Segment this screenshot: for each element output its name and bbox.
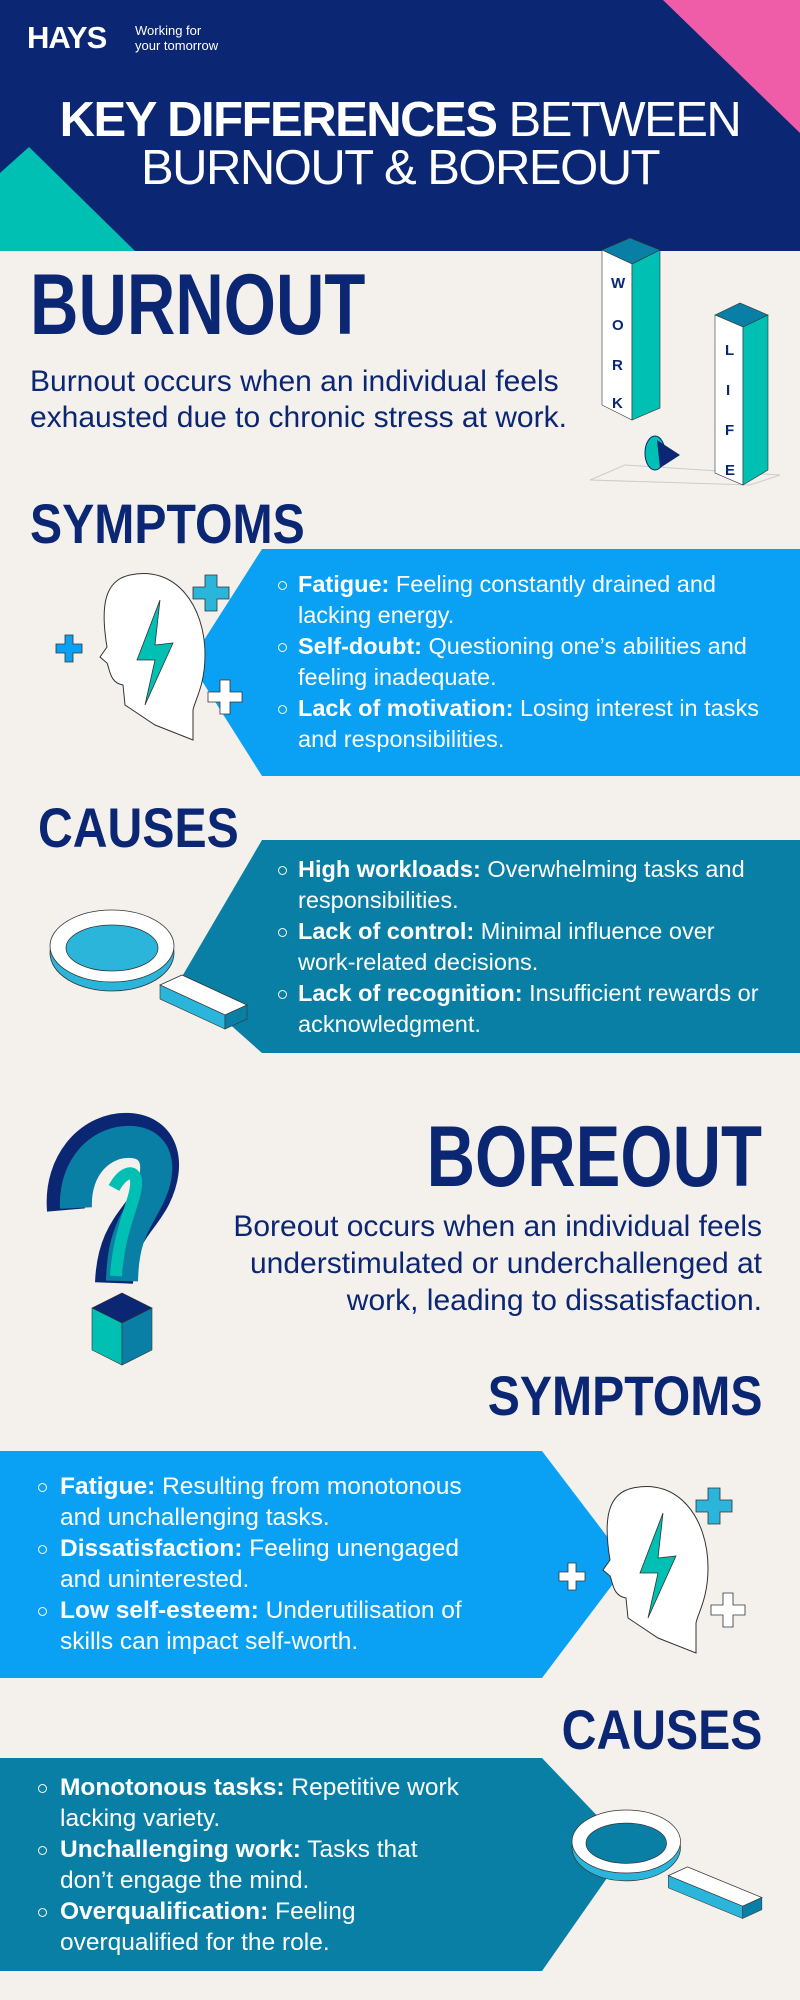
- text: boreout definition: work, leading to dissatisfaction.: [347, 1284, 762, 1317]
- logo: your tomorrow: [135, 38, 218, 53]
- list: causes: Overqualification: Feeling: [60, 1898, 355, 1925]
- heading: burnout symptoms: SYMPTOMS: [30, 492, 305, 555]
- title: [60, 93, 740, 195]
- list: causes: High workloads: Overwhelming tasks and: [298, 856, 745, 882]
- list: causes: [38, 1774, 459, 1956]
- list: symptoms: feeling inadequate.: [298, 664, 497, 690]
- text: burnout definition: Burnout occurs when an individual feels: [30, 365, 559, 398]
- list: symptoms: Low self-esteem: Underutilisation of: [60, 1597, 462, 1624]
- list: symptoms: and responsibilities.: [298, 726, 504, 752]
- list: causes: Unchallenging work: Tasks that: [60, 1836, 418, 1863]
- list: symptoms: and unchallenging tasks.: [60, 1504, 330, 1531]
- logo: HAYS: [27, 20, 106, 55]
- icon: head with lightning: [56, 573, 242, 741]
- list: symptoms: Dissatisfaction: Feeling unengaged: [60, 1535, 459, 1562]
- heading: boreout symptoms: SYMPTOMS: [487, 1364, 762, 1427]
- icon: work-life blocks: K: [612, 395, 623, 412]
- list: symptoms: Lack of motivation: Losing interest in tasks: [298, 695, 759, 721]
- decorative triangles: [0, 0, 800, 251]
- text: boreout definition: [233, 1210, 762, 1317]
- panel: burnout symptoms: [202, 549, 800, 776]
- icon: work-life blocks: I: [726, 382, 730, 399]
- icon: work-life blocks: E: [725, 462, 735, 479]
- list: causes: overqualified for the role.: [60, 1929, 330, 1956]
- list: causes: acknowledgment.: [298, 1011, 481, 1037]
- text: boreout definition: Boreout occurs when an individual feels: [233, 1210, 762, 1243]
- list: symptoms: lacking energy.: [298, 602, 454, 628]
- icon: work-life blocks: R: [612, 357, 623, 374]
- icon: head with lightning: [558, 1486, 746, 1654]
- icon: work-life blocks: L: [725, 342, 734, 359]
- heading: burnout: BURNOUT: [30, 257, 365, 353]
- list: causes: Lack of control: Minimal influence over: [298, 918, 715, 944]
- list: causes: [278, 856, 759, 1037]
- logo: Working for: [135, 23, 201, 38]
- list: symptoms: and uninterested.: [60, 1566, 249, 1593]
- panel: boreout causes: [0, 1758, 606, 1971]
- panel: boreout symptoms: [0, 1451, 612, 1678]
- heading: boreout: BOREOUT: [427, 1109, 762, 1205]
- list: causes: work-related decisions.: [298, 949, 538, 975]
- icon: work-life blocks: [590, 238, 780, 486]
- list: symptoms: [38, 1473, 462, 1655]
- header banner: [0, 0, 800, 251]
- icon: work-life blocks: O: [612, 317, 624, 334]
- logo: [27, 20, 218, 55]
- list: symptoms: [278, 571, 759, 752]
- icon: magnifier: [572, 1810, 763, 1919]
- title: KEY DIFFERENCES BETWEEN: [60, 93, 740, 147]
- list: symptoms: Fatigue: Feeling constantly drained and: [298, 571, 716, 597]
- list: symptoms: skills can impact self-worth.: [60, 1628, 358, 1655]
- list: causes: lacking variety.: [60, 1805, 220, 1832]
- list: causes: don’t engage the mind.: [60, 1867, 309, 1894]
- list: symptoms: Self-doubt: Questioning one’s abilities and: [298, 633, 747, 659]
- heading: burnout causes: CAUSES: [38, 796, 239, 859]
- text: boreout definition: understimulated or underchallenged at: [250, 1247, 762, 1280]
- icon: work-life blocks: W: [611, 275, 626, 292]
- text: burnout definition: [30, 365, 567, 434]
- list: symptoms: Fatigue: Resulting from monotonous: [60, 1473, 462, 1500]
- text: burnout definition: exhausted due to chronic stress at work.: [30, 401, 567, 434]
- panel: burnout causes: [183, 840, 800, 1053]
- list: causes: responsibilities.: [298, 887, 459, 913]
- icon: magnifier: [50, 910, 248, 1030]
- list: causes: Lack of recognition: Insufficient rewards or: [298, 980, 759, 1006]
- list: causes: Monotonous tasks: Repetitive work: [60, 1774, 459, 1801]
- title: BURNOUT & BOREOUT: [141, 141, 659, 195]
- icon: question mark: [46, 1112, 180, 1366]
- heading: boreout causes: CAUSES: [561, 1698, 762, 1761]
- icon: work-life blocks: F: [725, 422, 734, 439]
